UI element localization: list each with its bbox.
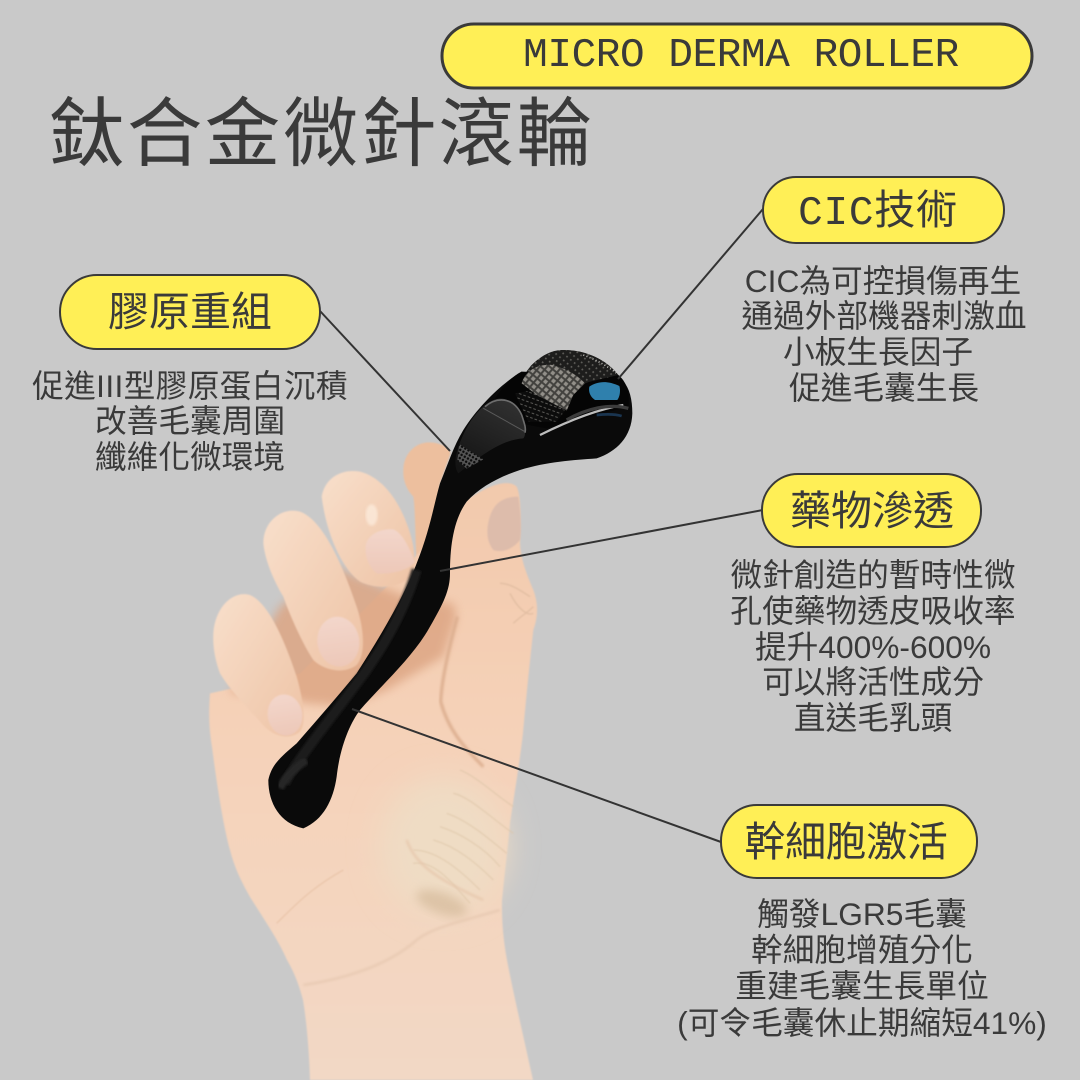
wrinkle shadow <box>413 884 470 922</box>
title: 鈦合金微針滾輪 <box>49 92 594 176</box>
callout: drug penetration <box>730 474 1016 736</box>
top label pill: MICRO DERMA ROLLER <box>523 33 959 79</box>
arm upper gloss <box>567 406 628 420</box>
handle gloss <box>285 570 417 783</box>
leader lines <box>320 209 763 842</box>
index nail <box>366 529 415 574</box>
heading pill: 幹細胞激活 <box>744 820 948 869</box>
description: 促進毛囊生長 <box>789 370 979 406</box>
description: 促進III型膠原蛋白沉積 <box>32 368 348 404</box>
index glare <box>366 504 378 526</box>
description: 微針創造的暫時性微 <box>730 557 1016 593</box>
description: CIC為可控損傷再生 <box>745 263 1021 299</box>
roller body <box>268 372 632 828</box>
heading pill <box>60 275 320 349</box>
description: (可令毛囊休止期縮短41%) <box>677 1005 1047 1041</box>
heading pill: 膠原重組 <box>108 291 272 339</box>
description: 通過外部機器刺激血 <box>741 298 1027 334</box>
palm and thumb <box>209 483 537 1080</box>
description: 提升400%-600% <box>755 629 991 665</box>
thumb knuckle creases <box>500 583 533 623</box>
needle drum <box>522 350 618 412</box>
callout: collagen <box>32 275 348 475</box>
description: 直送毛乳頭 <box>794 700 952 736</box>
housing interior <box>495 372 629 428</box>
arm gloss <box>540 405 623 435</box>
head panel fold <box>483 408 525 432</box>
callout: stem cells <box>677 805 1047 1041</box>
description: 觸發LGR5毛囊 <box>757 896 967 932</box>
shadow between fingers <box>230 567 457 707</box>
blue cap <box>589 382 620 400</box>
wrist crease <box>303 910 500 985</box>
heading pill: 藥物滲透 <box>790 490 954 538</box>
heading pill <box>763 177 1004 243</box>
wrinkle lines <box>413 770 513 903</box>
middle finger <box>263 511 363 670</box>
needle fringe <box>583 355 617 373</box>
pinky finger <box>213 594 304 737</box>
lower needles <box>515 390 565 422</box>
head panel arc <box>485 400 525 433</box>
description: 小板生長因子 <box>783 334 973 370</box>
back finger <box>403 442 450 567</box>
thumb nail <box>487 497 521 551</box>
hand holding roller photo <box>209 350 632 1080</box>
grip dots <box>457 444 483 469</box>
lower palm crease <box>277 870 343 923</box>
palm wrinkle zone <box>380 777 507 917</box>
needle drum top <box>530 350 618 383</box>
thenar crease <box>441 617 483 767</box>
middle nail <box>314 614 363 669</box>
heading pill <box>762 474 981 547</box>
heading pill: CIC技術 <box>798 189 958 237</box>
description: 重建毛囊生長單位 <box>735 968 989 1004</box>
needle drum mesh <box>522 365 585 411</box>
inner palm crease <box>407 840 483 900</box>
pinky nail <box>264 692 306 738</box>
description: 纖維化微環境 <box>95 439 285 475</box>
description: 可以將活性成分 <box>762 664 984 700</box>
description: 孔使藥物透皮吸收率 <box>730 593 1016 629</box>
description: 改善毛囊周圍 <box>95 403 285 439</box>
blob gloss <box>280 760 307 788</box>
callout: CIC <box>741 177 1027 406</box>
inner blue glint <box>597 414 622 416</box>
description: 幹細胞增殖分化 <box>751 932 973 968</box>
top label pill <box>442 24 1032 88</box>
roller <box>268 350 632 828</box>
index finger <box>322 471 414 587</box>
head panel <box>455 399 525 473</box>
heading pill <box>721 805 977 878</box>
